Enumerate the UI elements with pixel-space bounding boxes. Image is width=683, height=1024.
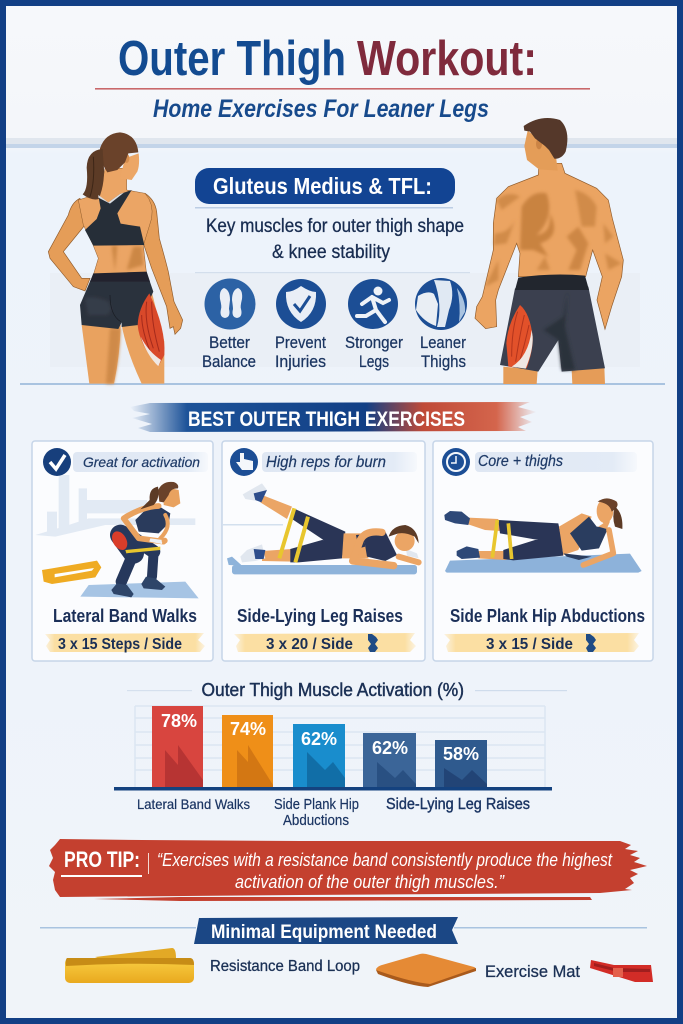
- tag: burn: [230, 448, 417, 476]
- label: mat: Exercise Mat: [485, 962, 580, 981]
- panel: side plank hip abductions: [433, 441, 653, 661]
- equipment ribbon: Minimal Equipment Needed: [211, 922, 437, 943]
- hair: [100, 132, 138, 172]
- top: [135, 506, 170, 533]
- illustration: side-lying raise: [227, 483, 419, 574]
- bar: lateral band walks 78: [152, 706, 203, 787]
- tag: burn: High reps for burn: [266, 454, 386, 471]
- bar: side-lying 58: 58%: [443, 744, 479, 764]
- label: band: Resistance Band Loop: [210, 958, 360, 975]
- icon: leaner thighs: [415, 278, 467, 330]
- torso: [342, 533, 369, 558]
- bar: side plank 62: 62%: [301, 729, 337, 749]
- heading banner: best exercises: [130, 402, 537, 432]
- muscle highlight: woman: [138, 293, 164, 366]
- bar: side plank 62: [293, 724, 345, 787]
- back shading: [485, 190, 622, 287]
- label: better balance: Balance: [202, 352, 256, 371]
- lower leg: [478, 551, 507, 560]
- label: prevent injuries: Prevent: [275, 333, 326, 352]
- panel: lateral band walks: [32, 441, 213, 661]
- reps strip: 3 x 20 / Side: [266, 636, 353, 653]
- bar: 62: 62%: [372, 738, 408, 758]
- hair: [524, 118, 567, 159]
- callout: pro tip: [49, 839, 647, 901]
- text block: key muscles: Key muscles for outer thigh shape: [206, 216, 464, 237]
- callout: pro tip: activation of the outer thigh muscles.”: [235, 872, 505, 892]
- exercise name: Side Plank Hip Abductions: [450, 606, 645, 626]
- label: stronger legs: Stronger: [345, 333, 403, 352]
- icon: exercise mat: [376, 954, 476, 987]
- text block: key muscles: [206, 216, 464, 263]
- axis labels: Side Plank Hip: [274, 796, 359, 813]
- icon: resistance band loop: [65, 948, 194, 983]
- title: [118, 32, 537, 86]
- tag: core: [442, 448, 637, 476]
- bands: [492, 520, 512, 559]
- muscle highlight: man: [506, 305, 533, 369]
- bar: 74: 74%: [230, 719, 266, 739]
- icon: kettlebell: [368, 634, 378, 652]
- callout pill: Gluteus Medius & TFL:: [213, 173, 432, 199]
- panel: side-lying leg raises: [222, 441, 425, 661]
- figure: woman back view: [48, 132, 183, 384]
- icon: better balance: [204, 278, 256, 330]
- reps strip: 3 x 15 / Side: [486, 636, 573, 653]
- callout pill: [195, 168, 455, 204]
- upper leg: [468, 518, 500, 531]
- lower leg: [262, 549, 293, 562]
- shorts: [80, 280, 153, 329]
- arms: [142, 193, 183, 334]
- axis labels: Side-Lying Leg Raises: [386, 796, 530, 813]
- axis labels: Abductions: [283, 812, 349, 829]
- illustration: woman band walk: [42, 482, 199, 598]
- exercise name: Side-Lying Leg Raises: [237, 606, 403, 626]
- legs: [82, 325, 121, 384]
- label: leaner thighs: Leaner: [420, 333, 466, 352]
- tag: activation: [43, 448, 208, 476]
- equipment ribbon: [40, 917, 647, 944]
- label: prevent injuries: Injuries: [275, 352, 326, 371]
- bar: lateral band walks 78: 78%: [161, 711, 197, 731]
- reps strip: [444, 633, 639, 653]
- background scene: [35, 475, 195, 537]
- legs: [120, 535, 154, 582]
- icon: kettlebell: [586, 634, 596, 652]
- exercise name: Lateral Band Walks: [53, 606, 197, 626]
- label: stronger legs: Legs: [359, 352, 389, 371]
- callout: pro tip: PRO TIP:: [64, 847, 140, 872]
- text block: key muscles: & knee stability: [272, 242, 390, 263]
- reps strip: 3 x 15 Steps / Side: [58, 636, 182, 653]
- axis labels: Lateral Band Walks: [137, 796, 250, 812]
- tag: activation: Great for activation: [83, 454, 200, 470]
- bra: [85, 190, 144, 246]
- bar: 62: [363, 733, 416, 787]
- illustration: side plank: [444, 498, 642, 573]
- title: Workout:: [357, 32, 537, 86]
- label: better balance: [202, 333, 256, 371]
- heading banner: best exercises: BEST OUTER THIGH EXERCISES: [188, 408, 465, 431]
- body: [475, 163, 623, 329]
- upper leg: [260, 496, 292, 519]
- bar: 74: [222, 715, 273, 787]
- legs: [503, 367, 605, 384]
- label: stronger legs: [345, 333, 403, 371]
- torso: [559, 513, 592, 555]
- icon: prevent injuries: [276, 279, 326, 329]
- chart heading: Outer Thigh Muscle Activation (%): [202, 680, 464, 700]
- reps strip: [234, 633, 416, 653]
- subtitle: Home Exercises For Leaner Legs: [153, 95, 489, 123]
- shorts: [500, 287, 605, 372]
- tag: core: Core + thighs: [478, 453, 563, 470]
- callout: pro tip: “Exercises with a resistance band consistently produce the highest: [157, 850, 613, 870]
- label: leaner thighs: [420, 333, 466, 371]
- figure: man back view: [475, 118, 623, 384]
- head: [164, 487, 180, 507]
- title: Outer Thigh: [118, 32, 346, 86]
- torso: [78, 168, 152, 275]
- label: leaner thighs: Thighs: [421, 352, 466, 371]
- icon: red band: [590, 960, 653, 982]
- bar: side-lying 58: [435, 740, 487, 787]
- label: prevent injuries: [275, 333, 326, 371]
- bands: [279, 508, 308, 562]
- head: [524, 131, 558, 171]
- label: better balance: Better: [209, 333, 250, 352]
- icon: stronger legs: [348, 279, 398, 329]
- axis labels: [137, 796, 530, 829]
- bar chart: [114, 706, 552, 829]
